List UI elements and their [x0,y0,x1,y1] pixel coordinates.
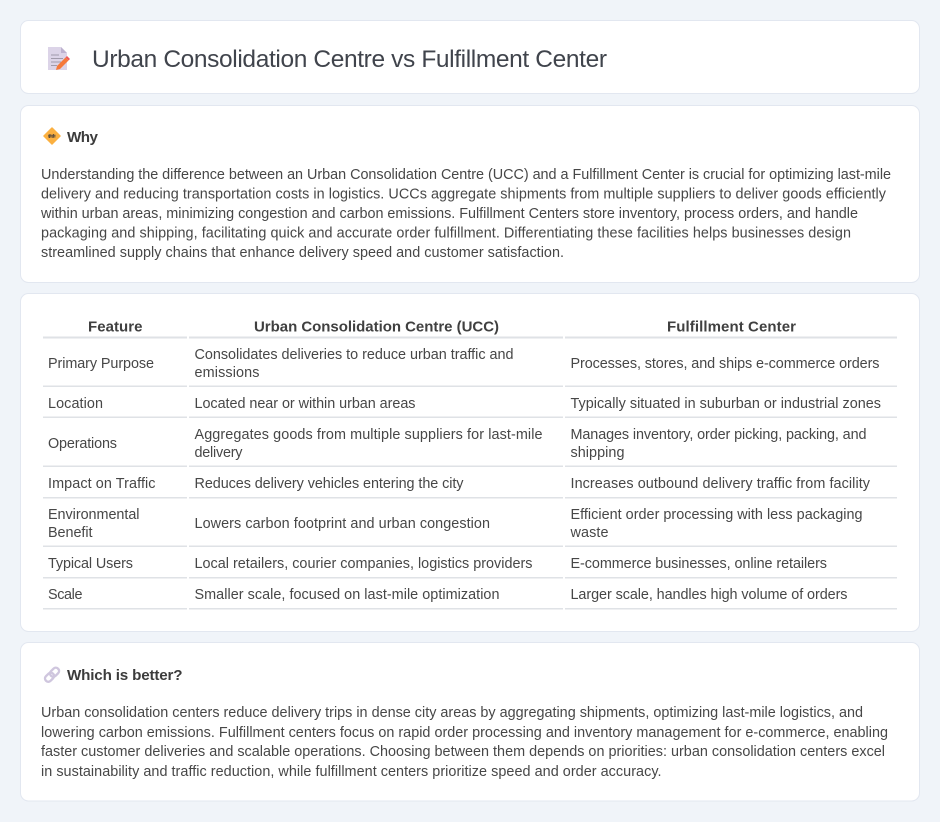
heading: which is better: Which is better? [67,667,182,684]
row: location: Typically situated in suburban or industrial zones [570,396,881,412]
row: environmental benefit: Lowers carbon footprint and urban congestion [194,516,490,532]
row: location: Location [48,396,103,412]
text block: which is better paragraph: in sustainability and traffic reduction, while fulfillment centers prioritize speed and order accuracy. [41,764,662,780]
row: impact on traffic: Increases outbound delivery traffic from facility [570,476,871,492]
row: scale [43,587,897,610]
row: environmental benefit: Efficient order processing with less packaging [570,507,862,523]
row: environmental benefit [43,507,897,547]
row: environmental benefit: waste [570,525,608,541]
table header row: Feature [88,318,142,336]
row: typical users [43,556,897,578]
row: operations [43,427,897,467]
row: operations: Manages inventory, order picking, packing, and [570,427,866,443]
row: primary purpose: Processes, stores, and ships e-commerce orders [570,356,880,372]
row: operations: Aggregates goods from multiple suppliers for last-mile [194,427,542,443]
row: location: Located near or within urban areas [194,396,416,412]
panel: why [20,106,920,282]
icon: warning diamond [44,128,60,144]
text block: why paragraph: delivery and reducing transportation costs in logistics. UCCs aggregate shipments from multiple suppliers to deliver goods efficiently [41,186,887,202]
text block: why paragraph: Understanding the difference between an Urban Consolidation Centre (UCC) and a Fulfillment Center is crucial for optimizing last-mile [41,167,891,183]
text block: which is better paragraph: faster customer deliveries and scalable operations. Choosing between them depends on priorities: urban consolidation centers excel [41,744,885,760]
row: operations: Operations [48,436,117,452]
row: primary purpose: Primary Purpose [48,356,154,372]
row: primary purpose [43,347,897,387]
row: typical users: E-commerce businesses, online retailers [570,556,827,572]
text block: which is better paragraph: lowering carbon emissions. Fulfillment centers focus on rapid order processing and inventory management for e-commerce, enabling [41,725,888,741]
row: scale: Scale [48,587,82,603]
row: impact on traffic [43,476,897,498]
row: location [43,396,897,418]
icon: document with pencil [48,47,70,70]
text block: why paragraph: streamlined supply chains that enhance delivery speed and customer satisfaction. [41,245,564,261]
row: primary purpose: Consolidates deliveries to reduce urban traffic and [194,347,514,363]
row: impact on traffic: Impact on Traffic [48,476,156,492]
icon: chain link [44,666,60,683]
row: environmental benefit: Benefit [48,525,92,541]
table header row: Urban Consolidation Centre (UCC) [254,318,499,336]
row: environmental benefit: Environmental [48,507,140,523]
text block: which is better paragraph [41,705,888,780]
row: scale: Smaller scale, focused on last-mile optimization [194,587,500,603]
row: primary purpose: emissions [194,365,260,381]
text block: which is better paragraph: Urban consolidation centers reduce delivery trips in dense city areas by aggregating shipments, optimizing last-mile logistics, and [41,705,863,721]
table header row [43,318,897,338]
heading: why: Why [67,129,99,146]
row: operations: shipping [570,445,624,461]
panel: which is better [20,642,920,801]
row: scale: Larger scale, handles high volume of orders [570,587,848,603]
panel: comparison table [20,294,920,632]
text block: why paragraph: within urban areas, minimizing congestion and carbon emissions. Fulfillment Centers store inventory, process orders, and handle [40,206,858,222]
row: typical users: Typical Users [48,556,133,572]
text block: why paragraph: packaging and shipping, facilitating quick and accurate order fulfillment. Differentiating these facilities helps businesses design [41,226,851,242]
row: impact on traffic: Reduces delivery vehicles entering the city [194,476,464,492]
row: operations: delivery [194,445,243,461]
panel: header [20,20,920,94]
row: typical users: Local retailers, courier companies, logistics providers [194,556,532,572]
table header row: Fulfillment Center [667,318,796,336]
title: Urban Consolidation Centre vs Fulfillment Center [92,46,607,73]
text block: why paragraph [40,167,891,261]
